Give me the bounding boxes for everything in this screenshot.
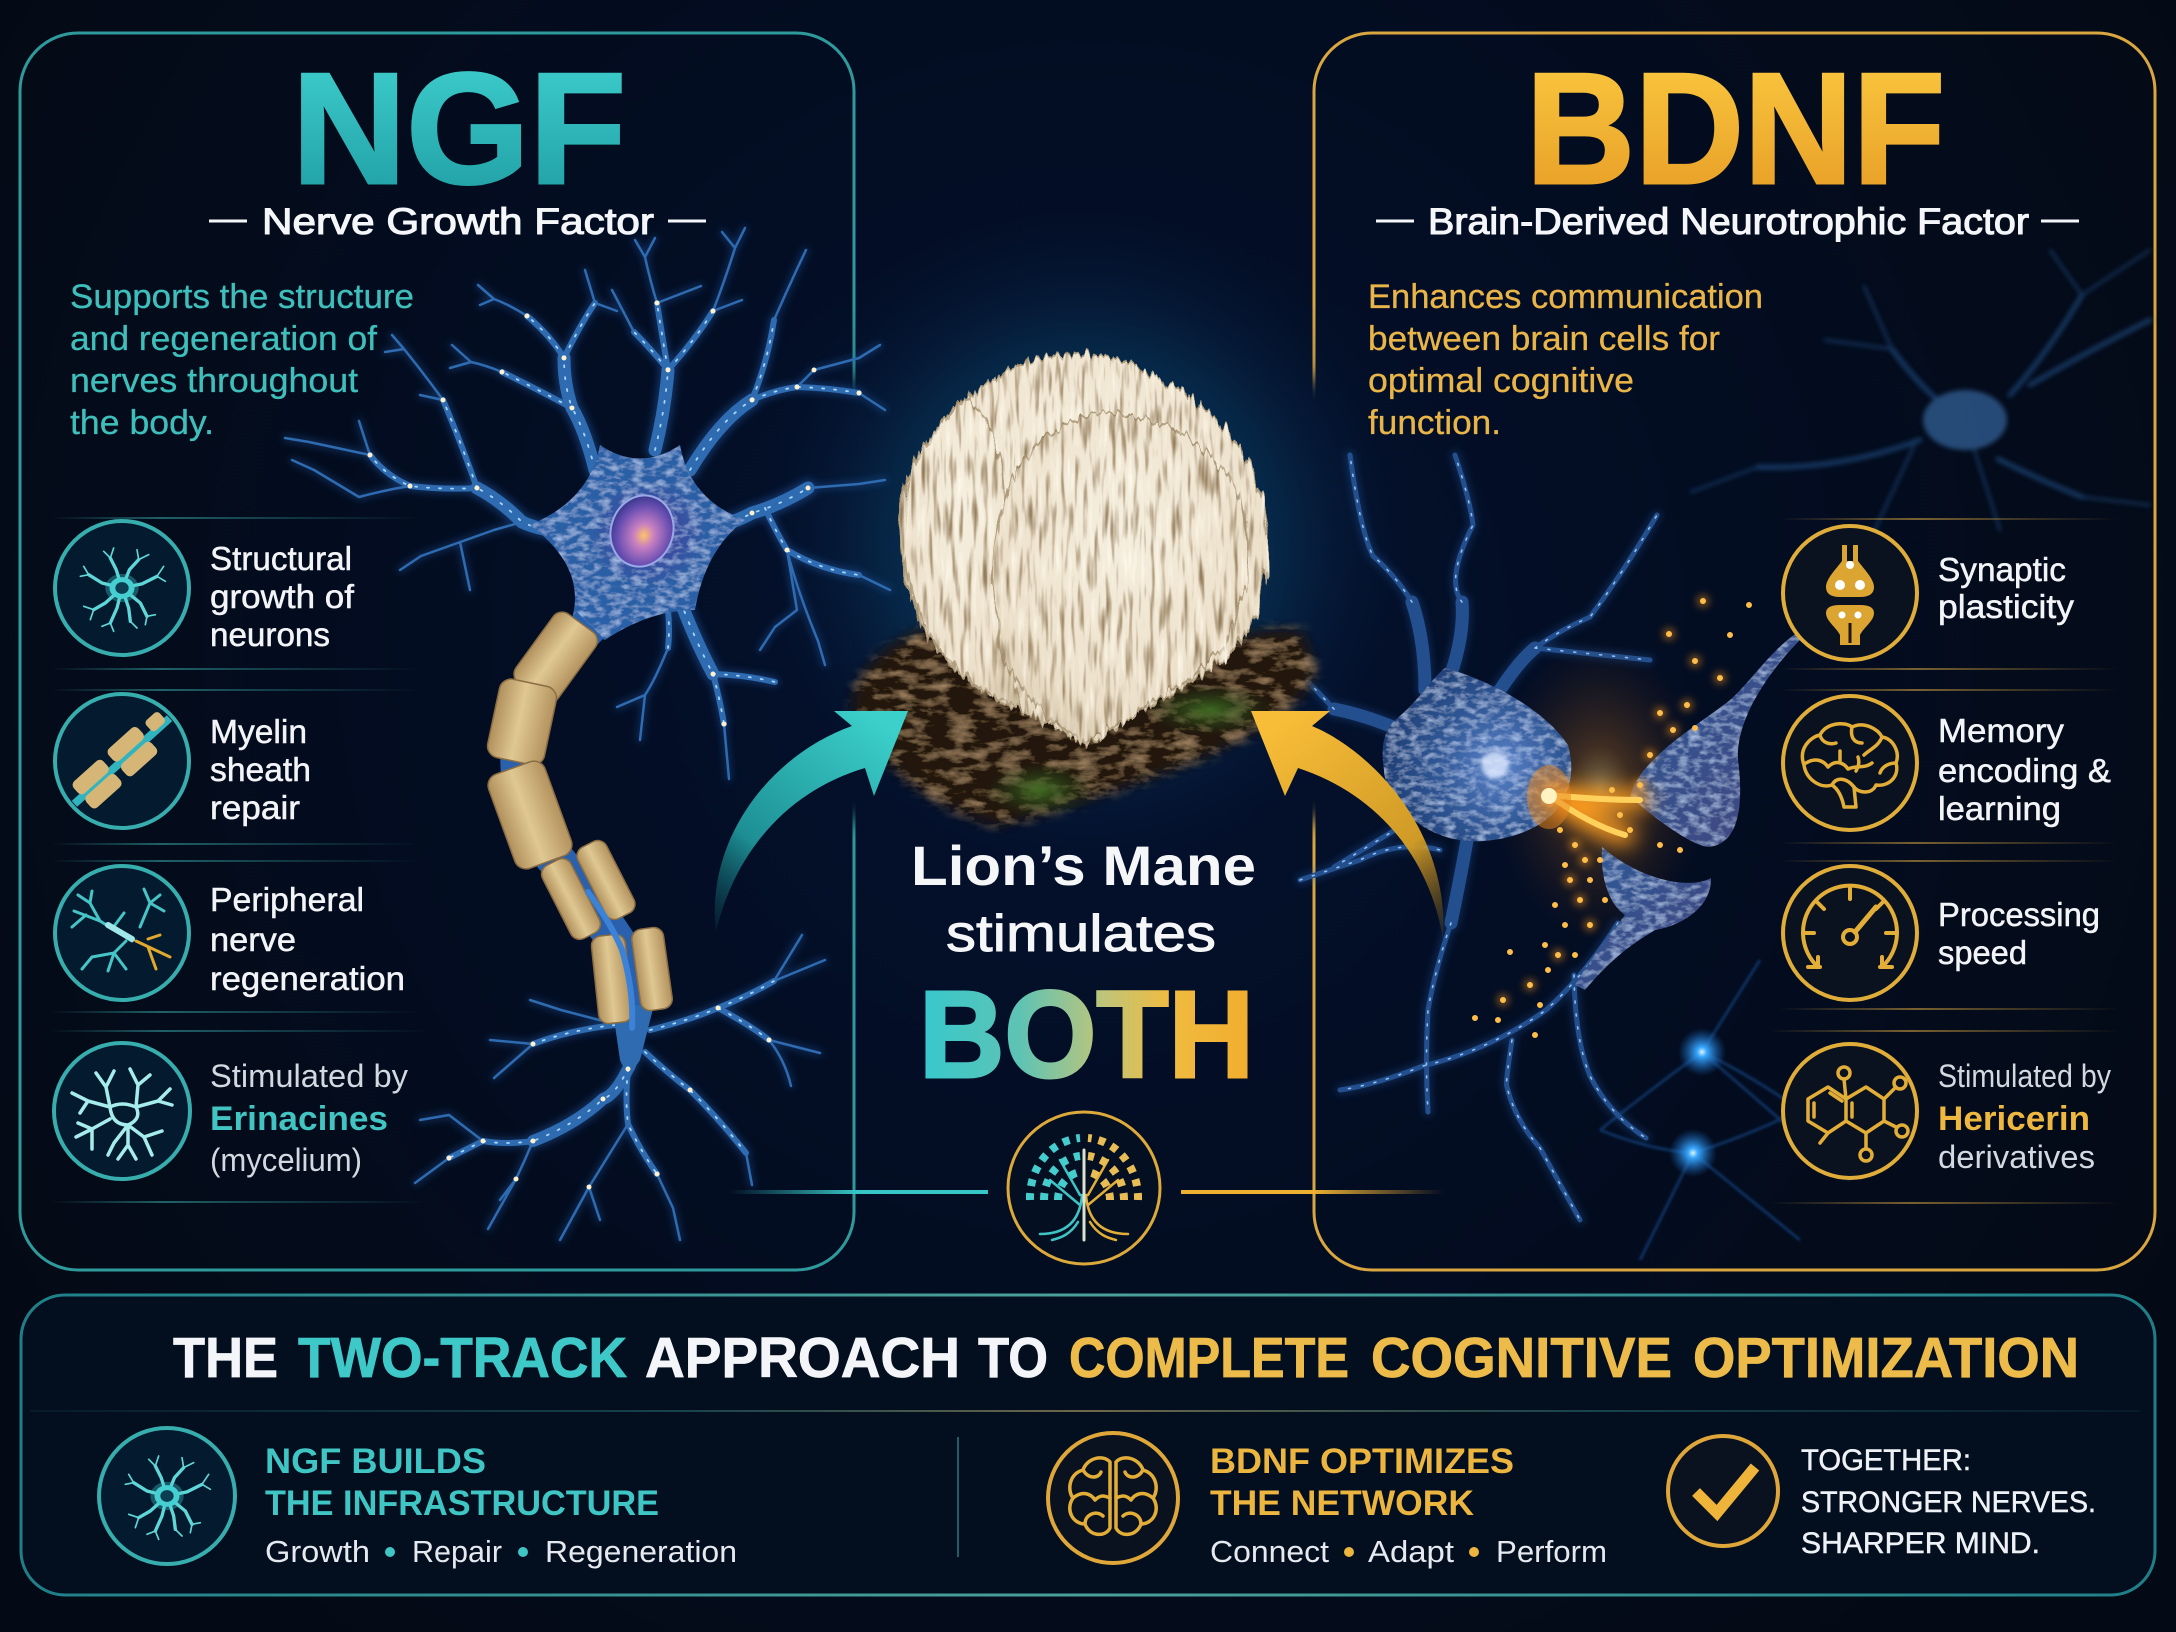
text: Adapt — [1368, 1534, 1454, 1569]
nucleus — [601, 487, 683, 575]
NGF description: the body. — [70, 404, 214, 442]
summary title: THE — [173, 1326, 278, 1390]
BDNF subtitle: Brain-Derived Neurotrophic Factor — [1428, 201, 2029, 242]
NGF subtitle: Nerve Growth Factor — [262, 201, 654, 242]
label — [210, 881, 405, 997]
item: structural growth of neurons — [55, 521, 355, 655]
label: Processing — [1938, 896, 2100, 933]
NGF description: Supports the structure — [70, 278, 414, 316]
text: THE INFRASTRUCTURE — [265, 1484, 659, 1523]
label: (mycelium) — [210, 1142, 362, 1178]
label: Memory — [1938, 712, 2065, 749]
summary: NGF builds — [99, 1428, 737, 1569]
center headline: stimulates — [946, 905, 1216, 963]
distant network: lower right — [1600, 960, 1850, 1260]
golden neurotransmitter particles — [1475, 601, 1749, 1035]
label: growth of — [210, 578, 355, 615]
center headline: Lion’s Mane — [911, 834, 1256, 897]
summary: together — [1668, 1436, 2096, 1560]
icon: neuron — [55, 521, 189, 655]
NGF row dividers — [50, 517, 430, 1203]
icon: neuron — [99, 1428, 235, 1564]
text — [1801, 1444, 2096, 1560]
label: derivatives — [1938, 1139, 2095, 1175]
cell body — [530, 445, 745, 640]
icon: regenerating nerve — [55, 866, 189, 1000]
label: learning — [1938, 790, 2061, 827]
label — [1938, 551, 2075, 625]
dendrites — [1300, 455, 1657, 1220]
panel outline: NGF — [20, 33, 854, 1270]
presynaptic cell body — [1383, 668, 1571, 841]
panel outline: BDNF — [1314, 33, 2155, 1270]
summary vertical divider — [957, 1437, 959, 1557]
text: Repair — [412, 1534, 502, 1569]
bright cell hotspots — [1481, 751, 1571, 829]
connector: gold — [1181, 1190, 1443, 1194]
neuron illustration: NGF — [285, 228, 890, 1240]
axon terminal flare — [612, 1005, 654, 1070]
summary title: OPTIMIZATION — [1693, 1326, 2079, 1390]
dendrite highlights — [370, 303, 859, 1174]
icon: check mark — [1668, 1436, 1778, 1546]
text: SHARPER MIND. — [1801, 1527, 2040, 1560]
summary divider — [30, 1410, 2140, 1412]
summary title — [173, 1326, 2079, 1390]
myelin sheaths — [485, 608, 674, 1025]
icon: tree emblem — [1008, 1112, 1160, 1264]
summary title: TWO-TRACK — [298, 1326, 627, 1390]
dendrites — [285, 228, 890, 1240]
icon: myelin — [55, 694, 189, 828]
axon — [519, 625, 632, 1012]
dendrite highlights — [1300, 455, 1657, 1220]
BDNF description: optimal cognitive — [1368, 362, 1634, 400]
BDNF description: Enhances communication — [1368, 278, 1763, 316]
lower terminal cup — [1575, 847, 1711, 990]
log — [852, 625, 1315, 826]
text: Perform — [1496, 1534, 1607, 1569]
panel outline: two-track summary — [21, 1295, 2155, 1595]
arrow: gold BDNF — [1251, 711, 1443, 939]
BDNF description: function. — [1368, 404, 1501, 442]
label: Peripheral — [210, 881, 364, 918]
item: memory encoding and learning — [1783, 696, 2111, 830]
label — [210, 1058, 408, 1178]
BDNF description: between brain cells for — [1368, 320, 1720, 358]
icon: molecule — [1783, 1044, 1917, 1178]
text: Connect — [1210, 1534, 1329, 1569]
label: neurons — [210, 616, 330, 653]
summary title: APPROACH — [645, 1326, 960, 1390]
text: BDNF OPTIMIZES — [1210, 1442, 1514, 1481]
label — [210, 713, 311, 826]
neuron illustration: BDNF synapse — [1300, 455, 1800, 1220]
lion's mane mushroom on log — [852, 354, 1315, 826]
connector: teal — [729, 1190, 988, 1194]
neuron glow — [285, 228, 890, 1240]
item: stimulated by hericerin derivatives — [1783, 1044, 2111, 1178]
arrow: teal NGF — [715, 711, 908, 932]
mushroom background glow — [754, 210, 1414, 870]
moss — [985, 684, 1275, 818]
label: Stimulated by — [1938, 1058, 2111, 1094]
synaptic release — [1549, 795, 1640, 835]
spark glow — [1495, 640, 1705, 940]
text — [1210, 1442, 1607, 1569]
icon: synapse — [1783, 526, 1917, 660]
synaptic sparkles — [370, 303, 859, 1187]
mushroom lobes — [901, 354, 1268, 744]
dendrite glow — [1300, 455, 1657, 1220]
BDNF row dividers — [1770, 518, 2120, 1204]
NGF heading: NGF — [292, 41, 626, 217]
icon: gauge — [1783, 866, 1917, 1000]
text: TOGETHER: — [1801, 1444, 1971, 1477]
label: Erinacines — [210, 1100, 388, 1138]
center headline: BOTH — [919, 967, 1254, 1104]
summary title: COGNITIVE — [1371, 1326, 1672, 1390]
label — [1938, 1058, 2111, 1175]
particle glow — [1503, 601, 1720, 1000]
label: encoding & — [1938, 752, 2111, 789]
item: processing speed — [1783, 866, 2100, 1000]
BDNF heading: BDNF — [1526, 41, 1945, 217]
label — [1938, 896, 2100, 971]
label: nerve — [210, 921, 296, 958]
icon: mycelium — [54, 1043, 190, 1179]
label: Myelin — [210, 713, 307, 750]
label: sheath — [210, 751, 311, 788]
item: stimulated by erinacines — [54, 1043, 408, 1179]
text: NGF BUILDS — [265, 1442, 486, 1481]
item: synaptic plasticity — [1783, 526, 2075, 660]
text: THE NETWORK — [1210, 1484, 1474, 1523]
label: speed — [1938, 934, 2027, 971]
icon: brain — [1783, 696, 1917, 830]
icon: brain front view — [1048, 1433, 1178, 1563]
label — [210, 540, 355, 653]
summary title: TO — [978, 1326, 1048, 1390]
postsynaptic terminal — [1630, 633, 1800, 847]
axon core — [588, 892, 632, 1028]
BDNF description — [1368, 278, 1763, 442]
text: Growth — [265, 1534, 370, 1569]
NGF description: and regeneration of — [70, 320, 378, 358]
label: Stimulated by — [210, 1058, 408, 1094]
label: plasticity — [1938, 588, 2075, 625]
text: Regeneration — [545, 1534, 737, 1569]
summary: BDNF optimizes — [1048, 1433, 1607, 1569]
text — [265, 1442, 737, 1569]
distant neuron: top right — [1691, 250, 2150, 540]
NGF description: nerves throughout — [70, 362, 359, 400]
summary title: COMPLETE — [1069, 1326, 1349, 1390]
NGF description — [70, 278, 414, 442]
label: regeneration — [210, 960, 405, 997]
item: peripheral nerve regeneration — [55, 866, 405, 1000]
label — [1938, 712, 2111, 827]
label: Hericerin — [1938, 1100, 2090, 1138]
label: Synaptic — [1938, 551, 2066, 588]
text: STRONGER NERVES. — [1801, 1486, 2096, 1519]
center headline — [911, 834, 1256, 1104]
label: repair — [210, 789, 300, 826]
label: Structural — [210, 540, 352, 577]
item: myelin sheath repair — [55, 694, 311, 828]
